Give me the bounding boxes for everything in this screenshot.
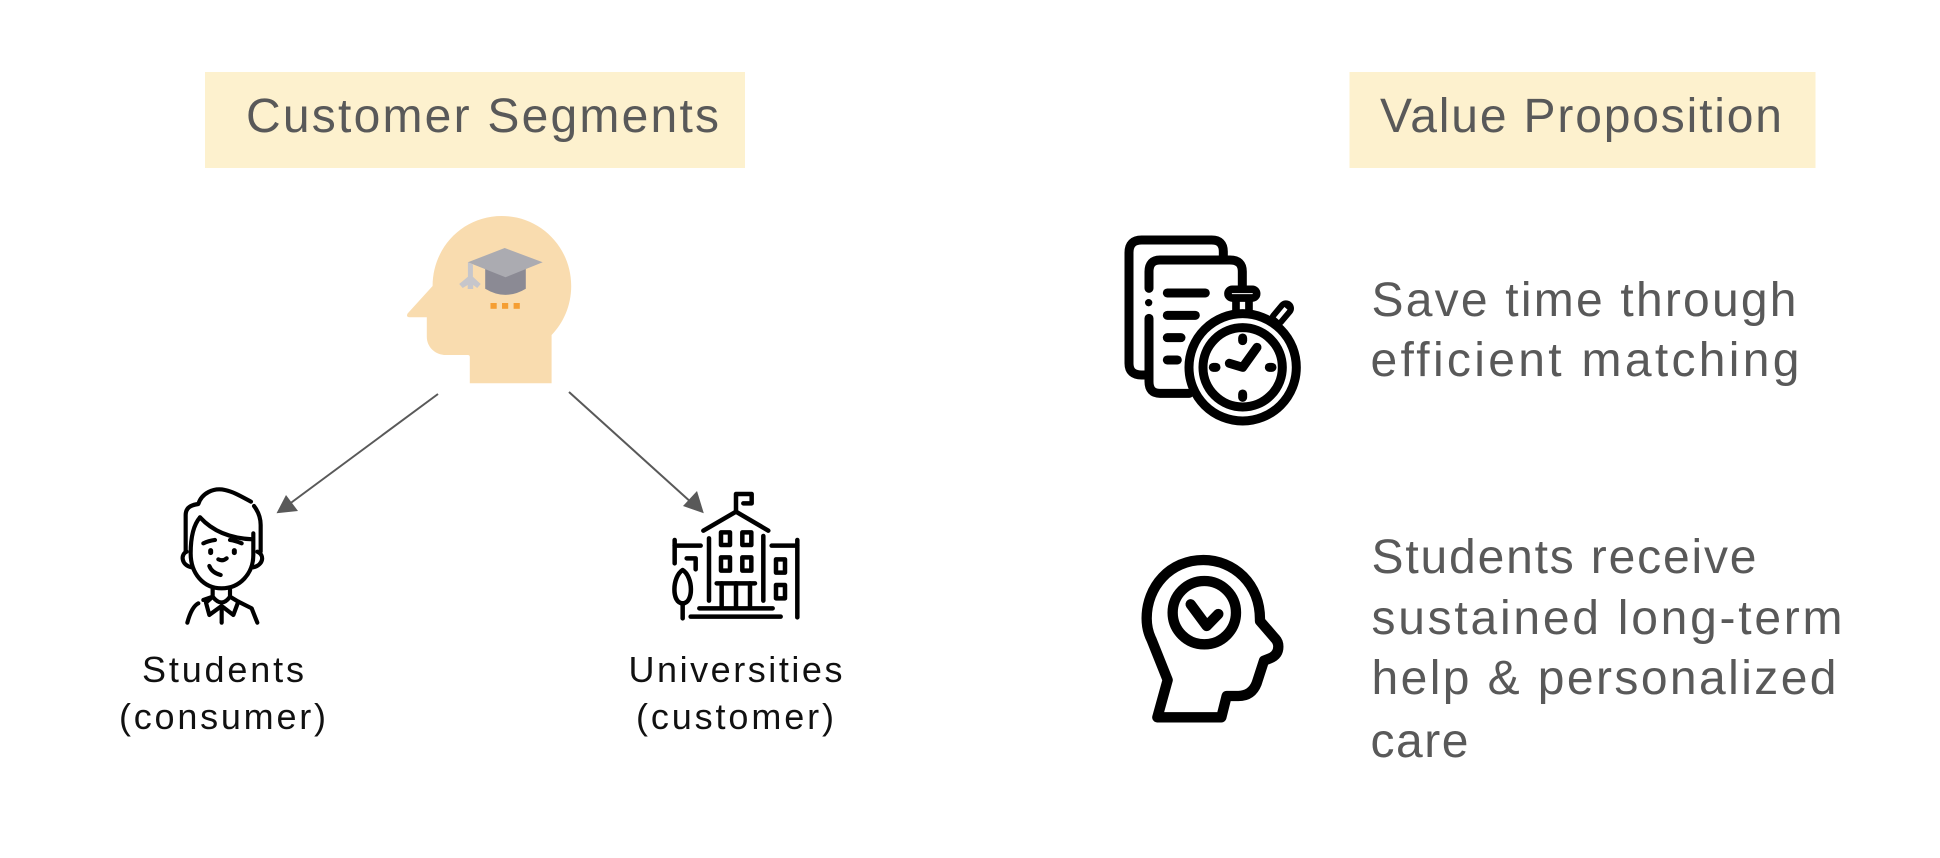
label: universities (628, 649, 842, 737)
panel: value proposition (1129, 72, 1842, 768)
label: universities: (customer) (636, 696, 834, 737)
arrow: head to students (276, 394, 438, 513)
text: save time: Save time through (1372, 274, 1796, 327)
text: students receive: sustained long-term (1372, 592, 1842, 645)
icon: documents and stopwatch (1129, 240, 1296, 421)
heading: value proposition: Value Proposition (1380, 90, 1782, 143)
heading: value proposition (1350, 72, 1816, 168)
label: students: Students (142, 649, 304, 690)
text: students receive: Students receive (1372, 531, 1756, 584)
icon: student (183, 489, 262, 623)
text: students receive: care (1370, 715, 1468, 768)
icon: head with graduation cap (407, 216, 571, 383)
icon: head with clock (1147, 560, 1278, 717)
heading: customer segments: Customer Segments (246, 90, 719, 143)
text: save time (1370, 274, 1800, 387)
label: students (119, 649, 326, 737)
heading: customer segments (205, 72, 745, 168)
text: save time: efficient matching (1370, 334, 1800, 387)
text: students receive (1370, 531, 1842, 768)
label: universities: Universities (628, 649, 842, 690)
icon: university building (674, 494, 797, 618)
label: students: (consumer) (119, 696, 326, 737)
arrow: head to universities (569, 392, 704, 513)
text: students receive: help & personalized (1372, 652, 1836, 705)
panel: customer segments (119, 72, 842, 737)
